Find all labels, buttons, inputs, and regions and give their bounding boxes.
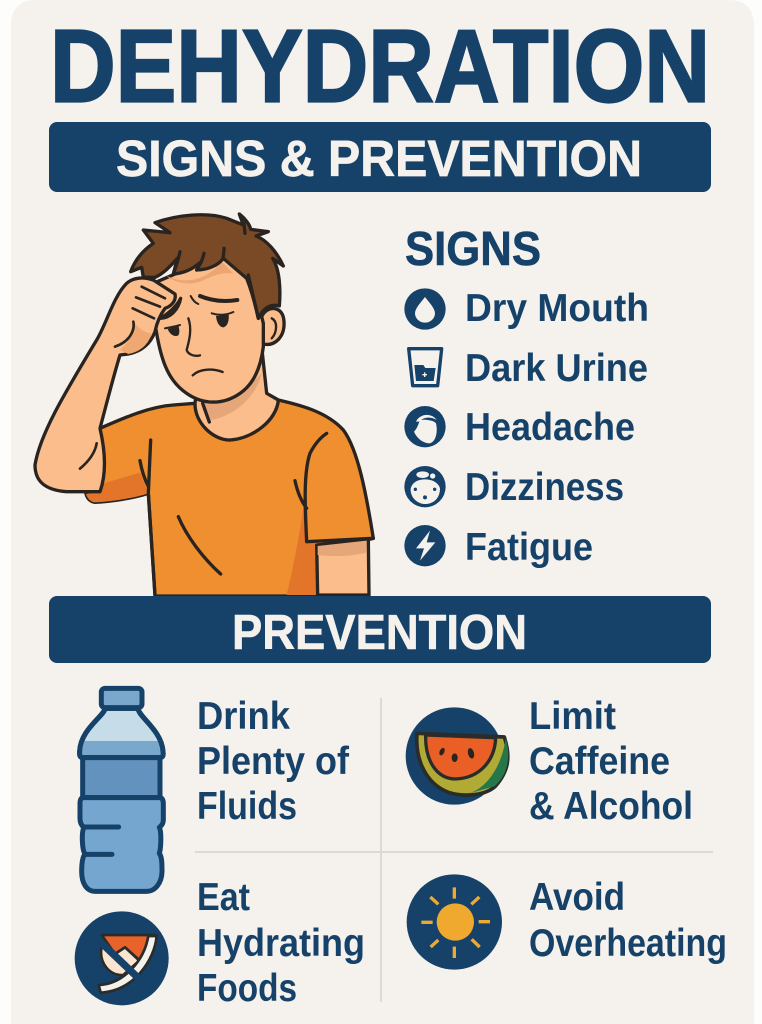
sign: fatigue: Fatigue — [465, 526, 593, 569]
sign: headache — [404, 406, 635, 449]
prevention: eat hydrating foods: Hydrating — [197, 922, 365, 965]
prevention: limit caffeine and alcohol: Limit — [529, 695, 616, 738]
icon: dizzy face — [404, 466, 446, 507]
prevention: eat hydrating foods — [197, 876, 365, 1010]
prevention: limit caffeine and alcohol: & Alcohol — [529, 785, 693, 828]
icon: water drop — [404, 288, 446, 330]
icon: crossed-out food in circle — [75, 911, 169, 1005]
sign: dizziness: Dizziness — [465, 466, 624, 509]
prevention: drink plenty of fluids: Fluids — [197, 785, 297, 828]
banner: prevention: PREVENTION — [232, 606, 527, 660]
prevention: eat hydrating foods: Eat — [197, 876, 250, 919]
prevention: drink plenty of fluids: Drink — [197, 695, 290, 738]
prevention: drink plenty of fluids: Plenty of — [197, 740, 350, 783]
sign: dark urine: Dark Urine — [465, 347, 648, 390]
prevention: avoid overheating: Overheating — [529, 922, 727, 965]
sign: dizziness — [404, 466, 624, 509]
sign: fatigue — [404, 525, 593, 569]
heading: signs: SIGNS — [405, 223, 541, 276]
icon: watermelon in circle — [406, 707, 508, 805]
illustration: tired man holding his head — [35, 214, 373, 596]
prevention: avoid overheating — [529, 876, 727, 965]
prevention: limit caffeine and alcohol: Caffeine — [529, 740, 670, 783]
icon: cup — [409, 349, 442, 386]
prevention: avoid overheating: Avoid — [529, 876, 625, 919]
banner: prevention — [49, 596, 711, 663]
banner: signs and prevention — [49, 122, 711, 192]
prevention: drink plenty of fluids — [197, 695, 350, 828]
sign: headache: Headache — [465, 406, 635, 449]
prevention: limit caffeine and alcohol — [529, 695, 693, 828]
prevention: eat hydrating foods: Foods — [197, 967, 297, 1010]
icon: sun in circle — [407, 874, 502, 970]
sign: dry mouth: Dry Mouth — [465, 287, 649, 330]
icon: lightning bolt — [404, 525, 446, 566]
banner: signs and prevention: SIGNS & PREVENTION — [116, 130, 642, 187]
icon: water bottle — [80, 688, 163, 891]
icon: head — [404, 406, 446, 447]
